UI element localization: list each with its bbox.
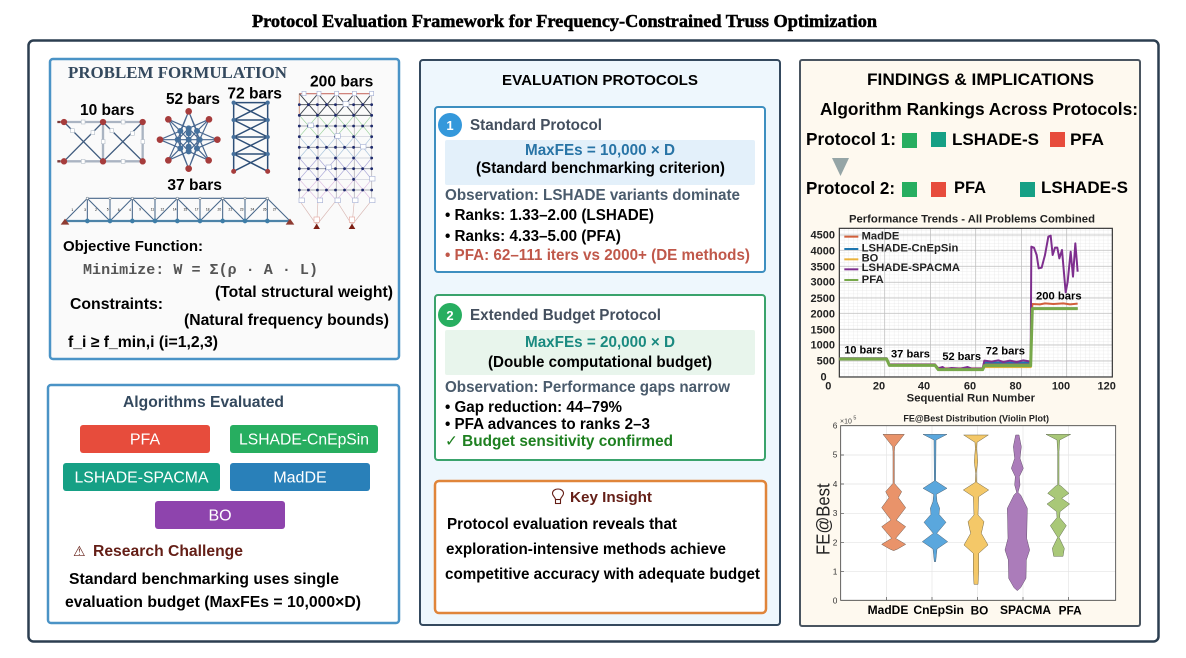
- observation: Observation: LSHADE variants dominate: [445, 187, 740, 204]
- y axis tick labels: 500: [817, 355, 835, 367]
- legend: [844, 231, 960, 286]
- x axis labels: CnEpSin: [913, 603, 964, 617]
- label: 37 bars: 37 bars: [167, 177, 222, 194]
- badge 2: 2: [446, 308, 454, 323]
- truss: 37 bars: 4: [129, 208, 131, 212]
- objective function label: Objective Function:: [63, 238, 203, 255]
- x axis tick labels: 40: [918, 380, 930, 392]
- ranking row: protocol 1: Protocol 1:: [806, 129, 896, 149]
- x axis tick labels: 20: [873, 380, 885, 392]
- x axis tick labels: 100: [1052, 380, 1070, 392]
- plot title: FE@Best Distribution (Violin Plot): [903, 414, 1049, 424]
- chip: PFA: PFA: [130, 432, 160, 448]
- truss: 37 bars: 24: [250, 207, 254, 211]
- y axis tick labels: 4500: [811, 230, 835, 242]
- title: Protocol Evaluation Framework for Frequency-Constrained Truss Optimization: [252, 11, 877, 31]
- ranking row: protocol 2: PFA: [954, 178, 986, 197]
- y axis tick labels: 4000: [811, 246, 835, 258]
- panel: findings and implications: [800, 60, 1140, 626]
- legend: BO: [862, 252, 879, 264]
- x axis labels: MadDE: [868, 603, 908, 617]
- card: key insight: [435, 481, 766, 613]
- research challenge text: Standard benchmarking uses single: [69, 571, 339, 588]
- truss: 37 bars: 18: [206, 207, 210, 211]
- budget highlight: [445, 330, 755, 375]
- y axis ticks: 3: [833, 508, 838, 518]
- panel: evaluation protocols: [420, 60, 780, 625]
- group labels: 37 bars: [891, 349, 930, 361]
- label: 52 bars: 52 bars: [166, 91, 220, 108]
- chip: LSHADE-CnEpSin: [230, 425, 378, 453]
- y axis tick labels: 1500: [811, 324, 835, 336]
- bullet list: • PFA advances to ranks 2–3: [445, 416, 650, 433]
- group labels: 72 bars: [986, 345, 1025, 357]
- truss: 37 bars: 14: [173, 207, 177, 211]
- truss: 72 bars: [234, 103, 268, 171]
- bullet list: [445, 207, 750, 264]
- truss: 52 bars: [160, 111, 217, 169]
- group labels: 200 bars: [1036, 291, 1082, 303]
- axis exponent: 5: [853, 416, 856, 422]
- ranking row: protocol 1: PFA: [1070, 130, 1104, 149]
- truss: 37 bars: 11: [151, 207, 154, 211]
- chip: BO: [155, 501, 285, 529]
- ranking row: protocol 2: LSHADE-S: [1041, 178, 1128, 197]
- panel: algorithms evaluated: [48, 385, 399, 623]
- panel: problem formulation: [50, 59, 399, 359]
- y axis tick labels: 3000: [811, 277, 835, 289]
- x axis labels: PFA: [1059, 604, 1082, 618]
- bullet list: ✓ Budget sensitivity confirmed: [445, 433, 673, 450]
- x axis tick labels: 120: [1097, 380, 1116, 392]
- axis exponent: ×10: [840, 419, 852, 426]
- label: 72 bars: 72 bars: [227, 86, 282, 103]
- legend: MadDE: [862, 231, 900, 243]
- group labels: 52 bars: [942, 351, 981, 363]
- chip: MadDE: MadDE: [273, 470, 327, 486]
- x axis tick labels: 80: [1010, 380, 1022, 392]
- y axis tick labels: 2000: [811, 309, 835, 321]
- legend: LSHADE-SPACMA: [862, 262, 960, 274]
- y axis ticks: 0: [833, 595, 838, 605]
- truss: 200 bars: [299, 91, 375, 229]
- legend: PFA: [862, 274, 884, 286]
- research challenge text: [65, 571, 361, 611]
- y axis tick labels: [811, 230, 835, 383]
- truss: 37 bars: 26: [263, 207, 267, 211]
- heading: evaluation protocols: EVALUATION PROTOCOLS: [502, 72, 698, 89]
- violin: PFA: [1046, 434, 1071, 556]
- heading: algorithms evaluated: Algorithms Evaluated: [123, 394, 284, 411]
- truss: 37 bars: 3: [84, 208, 86, 212]
- y axis tick labels: 3500: [811, 261, 835, 273]
- ranking row: protocol 1: LSHADE-S: [952, 130, 1039, 149]
- card heading: Extended Budget Protocol: [470, 307, 661, 324]
- bullet list: • Gap reduction: 44–79%: [445, 399, 622, 416]
- badge 2: [438, 303, 462, 327]
- truss: 37 bars: 17: [195, 207, 199, 211]
- subheading: rankings: Algorithm Rankings Across Protocols:: [820, 99, 1138, 119]
- x axis title: Sequential Run Number: [907, 393, 1036, 405]
- total structural weight note: (Total structural weight): [215, 284, 393, 301]
- card: extended budget protocol: [435, 295, 765, 460]
- chip: PFA: [80, 425, 210, 453]
- bullet list: • Ranks: 4.33–5.00 (PFA): [445, 228, 621, 245]
- truss diagrams: [57, 74, 375, 229]
- chip: LSHADE-SPACMA: LSHADE-SPACMA: [74, 470, 209, 486]
- bullet list: • Ranks: 1.33–2.00 (LSHADE): [445, 207, 654, 224]
- natural frequency note: (Natural frequency bounds): [184, 312, 389, 329]
- icon: light bulb: [552, 489, 564, 504]
- x axis labels: SPACMA: [1000, 603, 1051, 617]
- violin: CnEpSin: [922, 434, 948, 562]
- violin: MadDE: [882, 434, 906, 551]
- truss: 37 bars: 27: [273, 207, 277, 211]
- badge 1: [438, 113, 462, 137]
- y axis ticks: 2: [833, 537, 838, 547]
- violin: BO: [963, 435, 989, 584]
- y axis ticks: 1: [833, 566, 838, 576]
- line chart: performance trends: [811, 214, 1116, 405]
- budget highlight: [445, 140, 755, 185]
- heading: research challenge: Research Challenge: [93, 543, 243, 560]
- violin: SPACMA: [1005, 435, 1030, 591]
- arrow: protocol 1 to protocol 2: [832, 158, 849, 176]
- card heading: Standard Protocol: [470, 117, 602, 134]
- y axis ticks: 6: [833, 421, 838, 431]
- legend: LSHADE-CnEpSin: [862, 242, 958, 254]
- y axis tick labels: 1000: [811, 340, 835, 352]
- bullet list: [445, 399, 673, 450]
- y axis ticks: 5: [833, 450, 838, 460]
- budget highlight: (Double computational budget): [488, 354, 712, 371]
- research challenge text: evaluation budget (MaxFEs = 10,000×D): [65, 594, 361, 611]
- violin plot: FE@Best distribution: [812, 414, 1116, 618]
- card: standard protocol: [435, 107, 765, 272]
- x axis tick labels: 0: [825, 380, 831, 392]
- y axis title: FE@Best: [812, 483, 833, 555]
- x axis labels: [868, 603, 1082, 618]
- heading: key insight: Key Insight: [570, 489, 652, 506]
- group labels: 10 bars: [844, 345, 883, 357]
- truss: 37 bars: 5: [107, 207, 109, 211]
- label: 10 bars: 10 bars: [80, 102, 134, 119]
- y axis ticks: [833, 421, 838, 605]
- truss: 37 bars: 1: [71, 208, 73, 212]
- badge 1: 1: [446, 118, 454, 133]
- truss: 37 bars: 21: [228, 207, 232, 211]
- truss: 10 bars: [57, 120, 145, 163]
- truss: 37 bars: 2: [95, 208, 97, 212]
- budget highlight: MaxFEs = 20,000 × D: [525, 334, 675, 351]
- y axis tick labels: 2500: [811, 293, 835, 305]
- budget highlight: (Standard benchmarking criterion): [476, 160, 725, 177]
- ranking row: protocol 2: [806, 178, 1128, 198]
- truss: 37 bars: 6: [118, 208, 120, 212]
- insight text: competitive accuracy with adequate budget: [445, 566, 760, 583]
- truss: 37 bars: 23: [240, 207, 244, 211]
- ranking row: protocol 1: [806, 129, 1104, 149]
- constraints label: Constraints:: [70, 296, 163, 313]
- truss: 37 bars: 20: [217, 207, 221, 211]
- x axis tick labels: [825, 380, 1116, 392]
- group labels: [844, 291, 1082, 363]
- insight text: [445, 516, 760, 583]
- truss: 37 bars: 9: [139, 207, 141, 211]
- chip: BO: BO: [208, 508, 232, 524]
- insight text: Protocol evaluation reveals that: [447, 516, 677, 533]
- insight text: exploration-intensive methods achieve: [446, 541, 726, 558]
- objective formula: Minimize: W = Σ(ρ · A · L): [83, 262, 318, 279]
- truss: 37 bars: [61, 198, 294, 225]
- observation: Observation: Performance gaps narrow: [445, 379, 731, 396]
- heading: findings: FINDINGS & IMPLICATIONS: [867, 70, 1094, 89]
- budget highlight: MaxFEs = 10,000 × D: [525, 142, 675, 159]
- ranking row: protocol 2: Protocol 2:: [806, 178, 895, 198]
- x axis labels: BO: [971, 604, 988, 618]
- x axis tick labels: 60: [964, 380, 976, 392]
- chip: LSHADE-CnEpSin: LSHADE-CnEpSin: [239, 432, 369, 448]
- y axis ticks: 4: [833, 479, 838, 489]
- chip: MadDE: [230, 463, 370, 491]
- truss: 37 bars: 15: [183, 207, 187, 211]
- constraint formula: f_i ≥ f_min,i (i=1,2,3): [68, 334, 218, 351]
- label: 200 bars: 200 bars: [310, 74, 373, 91]
- icon: warning: ⚠: [73, 543, 86, 559]
- y axis tick labels: 0: [821, 371, 827, 383]
- truss: 37 bars: 12: [160, 207, 164, 211]
- chip: LSHADE-SPACMA: [63, 463, 220, 491]
- heading: problem formulation: PROBLEM FORMULATION: [68, 63, 288, 82]
- chart title: Performance Trends - All Problems Combined: [849, 214, 1095, 226]
- axis exponent: [840, 416, 856, 426]
- series lines: [839, 236, 1078, 370]
- bullet list: • PFA: 62–111 iters vs 2000+ (DE methods): [445, 247, 750, 264]
